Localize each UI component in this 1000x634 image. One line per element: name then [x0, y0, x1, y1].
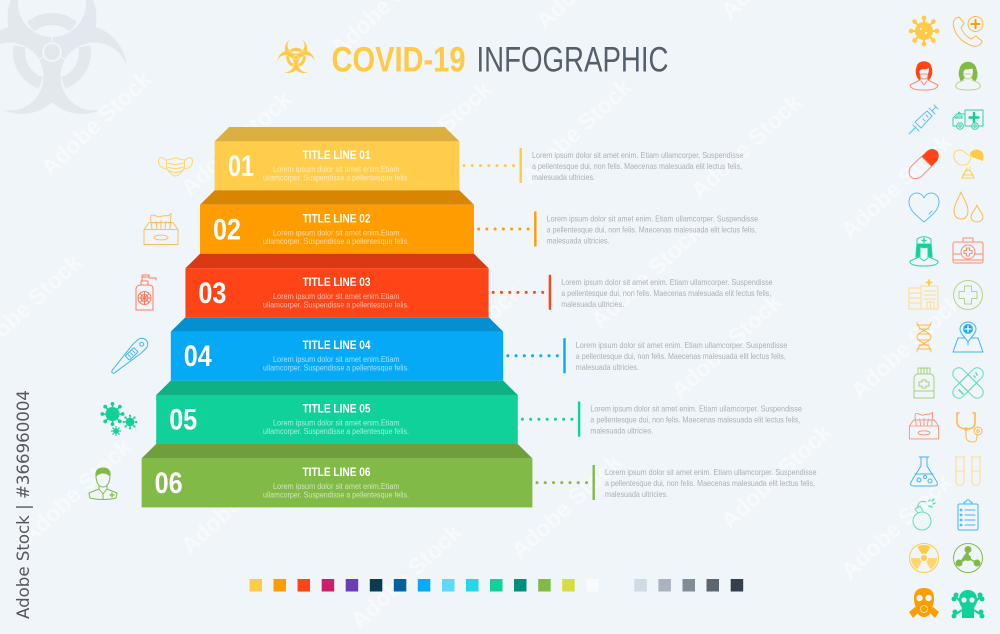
step 03: [185, 254, 489, 317]
callout 06: malesuada ultricies.: [605, 489, 668, 499]
icon: nurse: [910, 237, 938, 266]
watermark: Adobe Stock: [586, 219, 706, 334]
callout 05: a pellentesque dui, non felis. Maecenas malesuada elit lectus felis,: [590, 415, 800, 425]
watermark: Adobe Stock: [836, 129, 956, 244]
step 06: ullamcorper. Suspendisse a pellentesque felis.: [263, 490, 409, 500]
icon: bandages: [950, 365, 986, 401]
callout 05: Lorem ipsum dolor sit amet enim. Etiam ullamcorper. Suspendisse: [590, 404, 802, 414]
title: [277, 39, 668, 73]
step 02: ullamcorper. Suspendisse a pellentesque felis.: [263, 237, 409, 246]
watermark: Adobe Stock: [406, 279, 526, 394]
step 04: Lorem ipsum dolor sit amet enim.Etiam: [273, 355, 400, 364]
icon: map pin: [953, 322, 983, 352]
watermark: Adobe Stock: [176, 86, 296, 201]
step 03: ullamcorper. Suspendisse a pellentesque felis.: [263, 300, 409, 309]
icon: sanitizer bottle: [136, 275, 156, 310]
watermark: Adobe Stock: [506, 449, 626, 564]
step 02: Lorem ipsum dolor sit amet enim.Etiam: [273, 228, 400, 237]
watermark: Adobe Stock: [206, 229, 326, 344]
callout 02: [479, 211, 758, 246]
step 05: [156, 381, 518, 444]
step 01: Lorem ipsum dolor sit amet enim.Etiam: [273, 165, 400, 174]
watermark: Adobe Stock: [36, 66, 156, 181]
callout 02: a pellentesque dui, non felis. Maecenas malesuada elit lectus felis,: [547, 224, 757, 234]
icon: first aid kit: [953, 238, 983, 263]
callout 01: [464, 148, 744, 183]
callout 06: Lorem ipsum dolor sit amet enim. Etiam ullamcorper. Suspendisse: [605, 467, 817, 477]
title text: COVID-19: [332, 40, 466, 80]
step 01: [215, 127, 459, 190]
step 02: TITLE LINE 02: [302, 211, 371, 225]
icon: chemical: [954, 544, 982, 572]
watermark: Adobe Stock: [686, 89, 806, 204]
icon: medicine bottle: [914, 368, 934, 398]
step 06: Lorem ipsum dolor sit amet enim.Etiam: [273, 482, 400, 491]
callout 04: a pellentesque dui, non felis. Maecenas malesuada elit lectus felis,: [576, 351, 786, 361]
icon: heart: [909, 193, 939, 222]
step 06: 06: [155, 467, 183, 500]
stock credit text: Adobe Stock | #366960004: [14, 390, 34, 619]
icon: skull: [952, 590, 984, 618]
icon: doctor: [89, 468, 117, 500]
colour palette: [250, 579, 743, 592]
icon: ambulance: [953, 110, 983, 129]
step 03: 03: [198, 277, 226, 310]
background biohazard symbol: [0, 0, 126, 114]
callout 06: a pellentesque dui, non felis. Maecenas malesuada elit lectus felis,: [605, 478, 815, 488]
icon: stethoscope: [957, 413, 982, 442]
callout 01: a pellentesque dui, non felis. Maecenas malesuada elit lectus felis,: [532, 161, 742, 171]
step 01: ullamcorper. Suspendisse a pellentesque felis.: [263, 174, 409, 182]
icon: woman green: [956, 62, 980, 90]
callout 04: Lorem ipsum dolor sit amet enim. Etiam ullamcorper. Suspendisse: [576, 340, 788, 350]
step 01: TITLE LINE 01: [302, 148, 371, 162]
watermark: Adobe Stock: [176, 444, 296, 559]
callout 01: malesuada ultricies.: [532, 172, 595, 182]
callout 03: a pellentesque dui, non felis. Maecenas malesuada elit lectus felis,: [561, 288, 771, 298]
icon: radiation: [909, 544, 939, 572]
callout 02: Lorem ipsum dolor sit amet enim. Etiam ullamcorper. Suspendisse: [547, 213, 758, 223]
step 04: [171, 317, 503, 381]
step 05: 05: [169, 404, 197, 437]
step 01: 01: [228, 150, 254, 183]
icon: phone: [953, 16, 983, 46]
watermark: Adobe Stock: [16, 434, 136, 549]
icon grid: [909, 16, 986, 619]
watermark: Adobe Stock: [716, 419, 836, 534]
staircase infographic: [142, 127, 532, 507]
icon: biohazard: [277, 39, 315, 73]
step 05: TITLE LINE 05: [302, 402, 371, 416]
callout 03: malesuada ultricies.: [561, 299, 624, 309]
watermark: Adobe Stock: [346, 519, 466, 634]
icon: virus cluster: [100, 402, 137, 436]
step 05: Lorem ipsum dolor sit amet enim.Etiam: [273, 419, 400, 428]
step 02: [200, 190, 474, 254]
step 03: TITLE LINE 03: [302, 275, 371, 289]
icon: woman red: [910, 62, 938, 90]
icon: thermometer: [108, 336, 150, 377]
icon: face mask: [158, 158, 192, 176]
watermark: Adobe Stock: [516, 74, 636, 189]
icon: tissue box: [144, 214, 178, 244]
callout 02: malesuada ultricies.: [547, 235, 610, 245]
step 04: 04: [184, 340, 212, 373]
callout 05: malesuada ultricies.: [590, 426, 653, 436]
icon: bomb: [913, 499, 935, 530]
icon: drops: [954, 192, 983, 222]
icon: test tubes: [955, 457, 981, 486]
watermark: Adobe Stock: [846, 289, 966, 404]
callout 04: malesuada ultricies.: [576, 362, 639, 372]
step 04: ullamcorper. Suspendisse a pellentesque felis.: [263, 364, 409, 373]
step 02: 02: [213, 213, 241, 246]
step 06: TITLE LINE 06: [302, 465, 371, 479]
title text: INFOGRAPHIC: [476, 40, 668, 80]
icon: DNA: [917, 322, 931, 352]
callout 06: [537, 465, 817, 500]
callout 03: Lorem ipsum dolor sit amet enim. Etiam ullamcorper. Suspendisse: [561, 277, 773, 287]
icon: pill yellow: [954, 150, 984, 178]
step 04: TITLE LINE 04: [302, 338, 371, 352]
callout 05: [522, 402, 802, 437]
icon: flask: [911, 457, 937, 486]
icon: plus in circle: [954, 280, 982, 310]
step 05: ullamcorper. Suspendisse a pellentesque felis.: [263, 427, 409, 436]
icon: clipboard: [958, 500, 978, 530]
icon: gas mask: [909, 588, 939, 618]
icon: pill red: [909, 149, 939, 179]
watermark: Adobe Stock: [666, 289, 786, 404]
watermark: Adobe Stock: [376, 76, 496, 191]
icon: virus yellow: [909, 16, 939, 46]
step 03: Lorem ipsum dolor sit amet enim.Etiam: [273, 292, 400, 301]
callout 04: [508, 338, 788, 373]
callout 03: [493, 275, 773, 310]
icon: hospital: [909, 280, 938, 309]
watermark: Adobe Stock: [836, 469, 956, 584]
callout 01: Lorem ipsum dolor sit amet enim. Etiam ullamcorper. Suspendisse: [532, 150, 744, 160]
icon: tissue box salmon: [909, 412, 939, 439]
step 06: [142, 444, 532, 507]
icon: syringe: [909, 105, 938, 134]
